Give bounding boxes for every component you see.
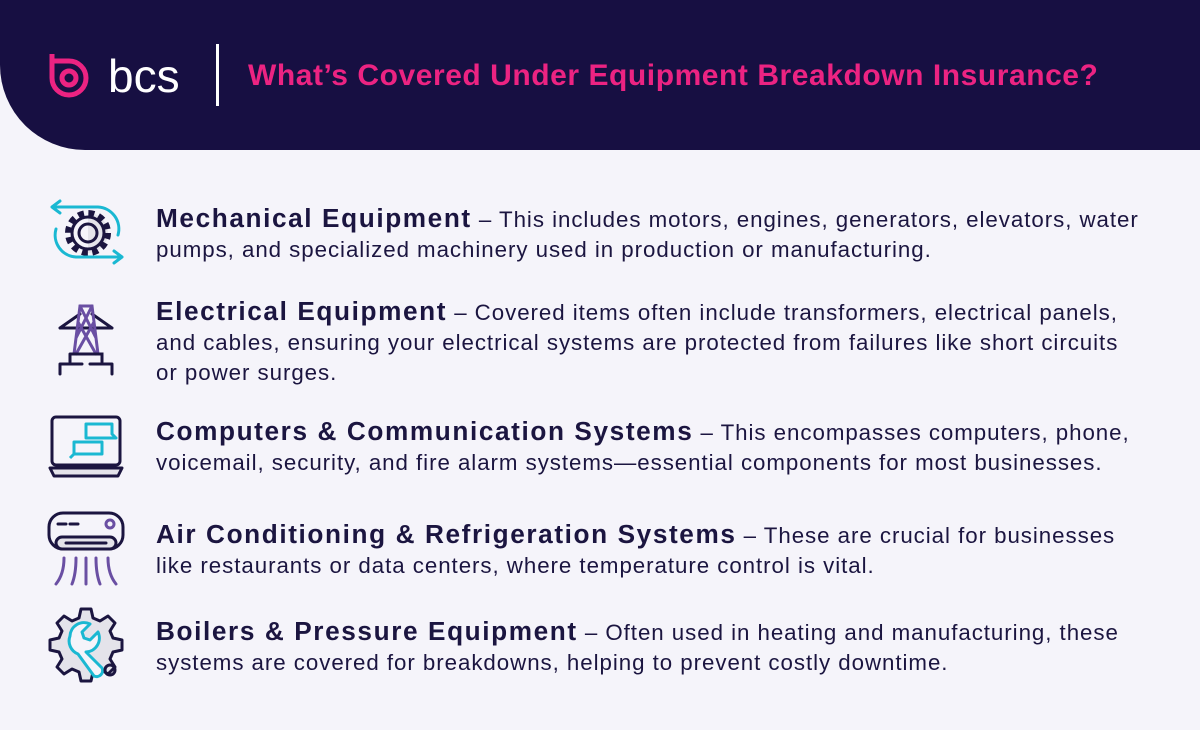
icon: gear with arrows bbox=[50, 199, 124, 265]
item: air conditioning: like restaurants or data centers, where temperature control is vital. bbox=[156, 553, 875, 578]
title: What’s Covered Under Equipment Breakdown Insurance? bbox=[248, 59, 1098, 92]
icon: pylon bbox=[58, 304, 114, 376]
icon: laptop bbox=[48, 416, 124, 478]
item: electrical: or power surges. bbox=[156, 360, 337, 385]
divider bbox=[216, 44, 219, 106]
item: boilers: systems are covered for breakdowns, helping to prevent costly downtime. bbox=[156, 650, 948, 675]
item: boilers bbox=[156, 616, 1119, 675]
item: air conditioning bbox=[156, 519, 1115, 578]
item: electrical: and cables, ensuring your electrical systems are protected from failures like short circuits bbox=[156, 330, 1118, 355]
icon: gear with wrench bbox=[48, 608, 124, 682]
item: computers bbox=[156, 416, 1130, 475]
item: electrical bbox=[156, 296, 1118, 385]
item: computers: Computers & Communication Systems – This encompasses computers, phone, bbox=[156, 416, 1130, 446]
item: boilers: Boilers & Pressure Equipment – Often used in heating and manufacturing, these bbox=[156, 616, 1119, 646]
header banner bbox=[0, 0, 1200, 150]
icon: air conditioner bbox=[48, 512, 124, 586]
item: electrical: Electrical Equipment – Covered items often include transformers, electrical panels, bbox=[156, 296, 1118, 326]
item: mechanical bbox=[156, 203, 1139, 262]
item: computers: voicemail, security, and fire alarm systems—essential components for most businesses. bbox=[156, 450, 1103, 475]
item: mechanical: Mechanical Equipment – This includes motors, engines, generators, elevators, water bbox=[156, 203, 1139, 233]
item: air conditioning: Air Conditioning & Refrigeration Systems – These are crucial for businesses bbox=[156, 519, 1115, 549]
item: mechanical: pumps, and specialized machinery used in production or manufacturing. bbox=[156, 237, 932, 262]
logo bbox=[50, 50, 180, 100]
